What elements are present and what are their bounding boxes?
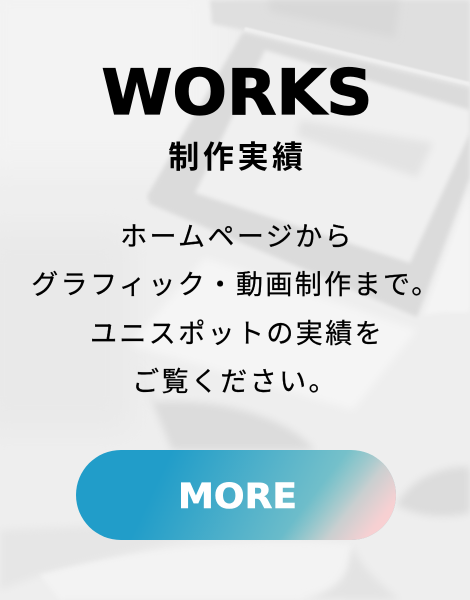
text block: description — [31, 222, 441, 397]
text block: description: ユニスポットの実績を — [90, 319, 384, 349]
button: more — [76, 450, 396, 540]
text block: description: ホームページから — [120, 222, 354, 252]
button label: MORE — [178, 477, 297, 517]
text block: description: グラフィック・動画制作まで。 — [31, 270, 441, 300]
text block: description: ご覧ください。 — [132, 367, 338, 397]
title: WORKS — [102, 56, 372, 129]
subtitle: 制作実績 — [168, 140, 307, 175]
